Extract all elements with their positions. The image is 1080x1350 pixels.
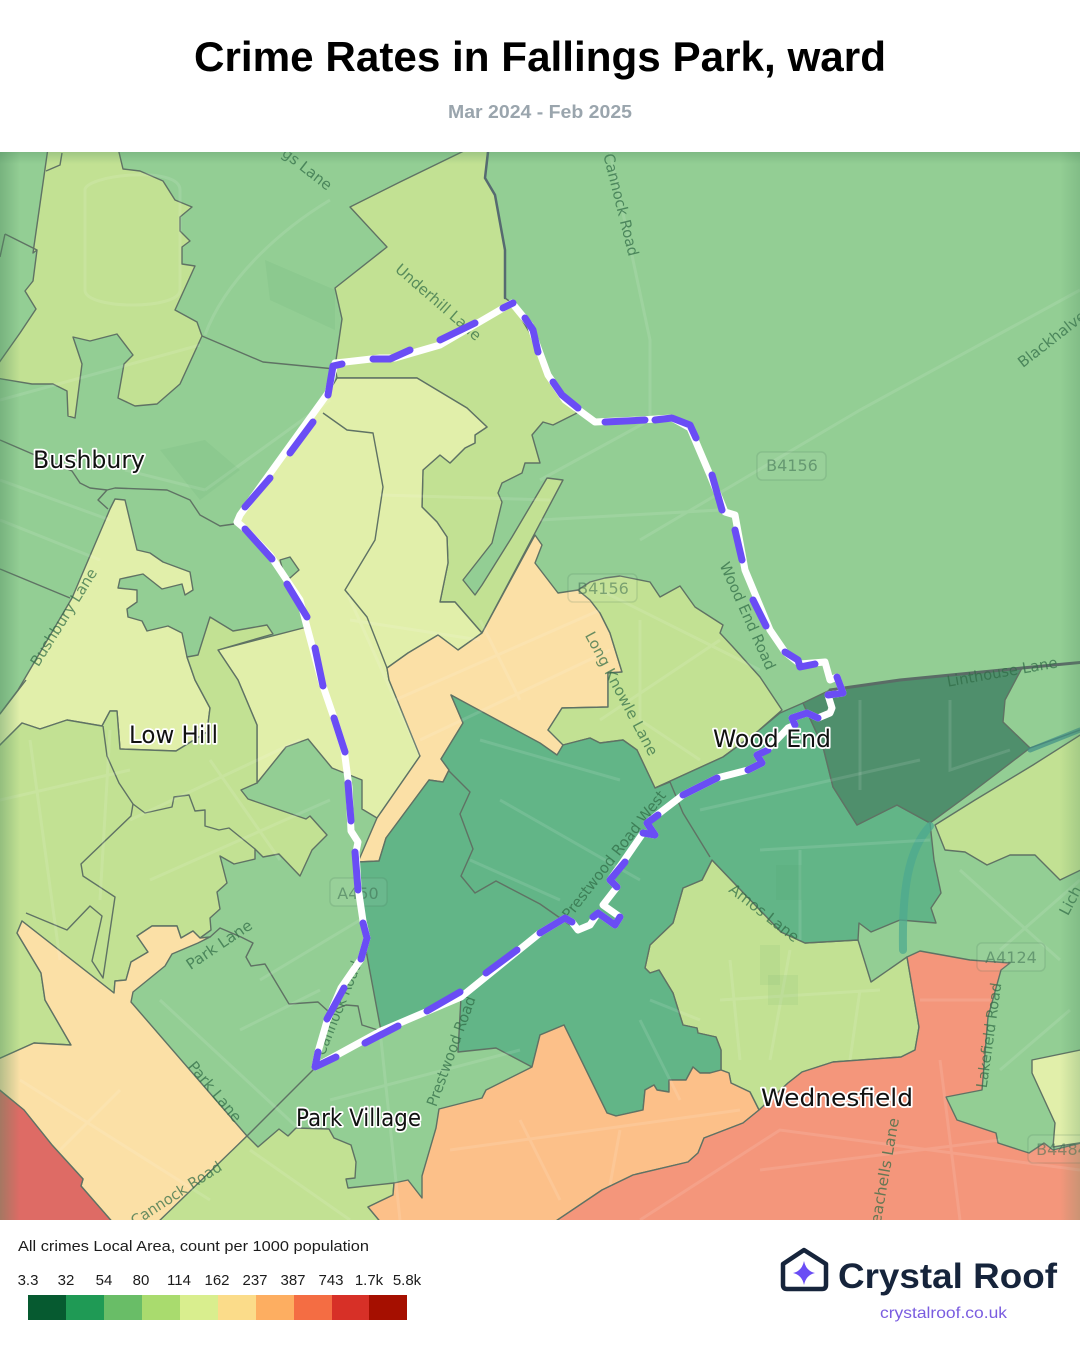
- street names: Peachells Lane: [865, 1116, 903, 1234]
- street names: Cannock Road: [127, 1158, 225, 1230]
- region: ward interior pale green: [218, 378, 487, 818]
- legend scale labels: 32: [58, 1272, 74, 1289]
- shield: A450: [330, 878, 387, 906]
- legend scale labels: 54: [96, 1272, 112, 1289]
- region: central dark green: [358, 695, 941, 1116]
- street names: Underhill Lane: [392, 260, 485, 344]
- region: Wednesfield salmon: [550, 951, 1080, 1225]
- place labels: Wood End: [713, 725, 831, 753]
- street names: Bushbury Lane: [26, 565, 101, 670]
- road number shields: [330, 452, 1080, 1163]
- ward boundary: Fallings Park: [237, 303, 843, 1067]
- region: Amos Lane light green: [645, 860, 919, 1110]
- legend scale labels: 743: [318, 1272, 344, 1289]
- legend title: All crimes Local Area, count per 1000 population: [18, 1238, 369, 1255]
- street names: Prestwood Road: [423, 994, 480, 1109]
- subtitle: date range: Mar 2024 - Feb 2025: [448, 102, 632, 122]
- street names: Wood End Road: [716, 559, 779, 673]
- faint road network: [0, 152, 1080, 1220]
- region: Long Knowle light green: [548, 576, 782, 788]
- place labels: [33, 446, 913, 1132]
- street names: Cannock Road: [311, 958, 365, 1058]
- shield: B4156 north: B4156: [766, 456, 818, 475]
- shield: A4124: A4124: [985, 948, 1037, 967]
- street names: Linthouse Lane: [945, 653, 1059, 691]
- title: Crime Rates in Fallings Park, ward: [194, 33, 886, 80]
- region: south orange: [368, 1025, 759, 1225]
- website url: crystalroof.co.uk: [880, 1305, 1008, 1322]
- ward outline purple dashes: [245, 303, 843, 1067]
- street names: Cannock Road: [599, 152, 642, 258]
- internal boundary lines: [0, 153, 1080, 1136]
- region: Low Hill pale green: [0, 499, 210, 751]
- shield: A4124: [977, 943, 1045, 971]
- region: north-west light green: [0, 148, 202, 418]
- region: Low Hill south light green: [0, 617, 327, 1060]
- street names: gs Lane: [279, 144, 336, 194]
- place labels: Park Village: [296, 1104, 421, 1132]
- place labels: Low Hill: [129, 721, 218, 749]
- street names: Lakefield Road: [973, 982, 1005, 1089]
- icon: house with star: [783, 1250, 826, 1289]
- region: south light green: [155, 1128, 394, 1225]
- shield: B4484: [1028, 1135, 1080, 1163]
- region: east light green: [935, 732, 1080, 880]
- street names: Amos Lane: [725, 880, 803, 946]
- logo wordmark: Crystal Roof: [838, 1257, 1057, 1296]
- region: Wood End darkest green: [803, 668, 1030, 825]
- region: south-west red: [0, 1087, 115, 1225]
- map edge vignette: [0, 152, 1080, 1220]
- base area: mid green: [0, 152, 1080, 1220]
- legend scale labels: 237: [242, 1272, 268, 1289]
- canal: [485, 152, 1080, 950]
- region: central tan: [358, 535, 622, 862]
- street names: Park Lane: [183, 916, 256, 974]
- shield: A450: A450: [337, 884, 379, 903]
- place labels: Wednesfield: [761, 1084, 913, 1112]
- legend colour swatches: [28, 1295, 407, 1320]
- legend scale labels: [18, 1272, 422, 1289]
- shield: B4156 north: [757, 452, 826, 480]
- ward outline white: [237, 303, 843, 1067]
- street names: [26, 144, 1080, 1234]
- logo: Crystal Roof: [783, 1250, 1057, 1322]
- legend scale labels: 5.8k: [393, 1272, 422, 1289]
- place labels: Bushbury: [33, 446, 145, 474]
- street names: Park Lane: [184, 1058, 246, 1126]
- region: Underhill light green: [335, 148, 577, 633]
- region: far east pale: [1032, 1049, 1080, 1147]
- region: small green block: [280, 557, 299, 578]
- shield: B4156 central: B4156: [577, 579, 629, 598]
- street names: Long Knowle Lane: [581, 629, 662, 759]
- region: south-west tan: [0, 921, 247, 1225]
- legend: [18, 1238, 422, 1320]
- shield: B4156 central: [568, 574, 637, 602]
- street names: Prestwood Road West: [558, 787, 670, 923]
- legend scale labels: 80: [133, 1272, 149, 1289]
- legend scale labels: 114: [167, 1272, 191, 1289]
- park shading: [760, 945, 798, 1005]
- legend scale labels: 387: [280, 1272, 306, 1289]
- legend scale labels: 162: [204, 1272, 230, 1289]
- legend scale labels: 3.3: [18, 1272, 38, 1289]
- legend scale labels: 1.7k: [355, 1272, 384, 1289]
